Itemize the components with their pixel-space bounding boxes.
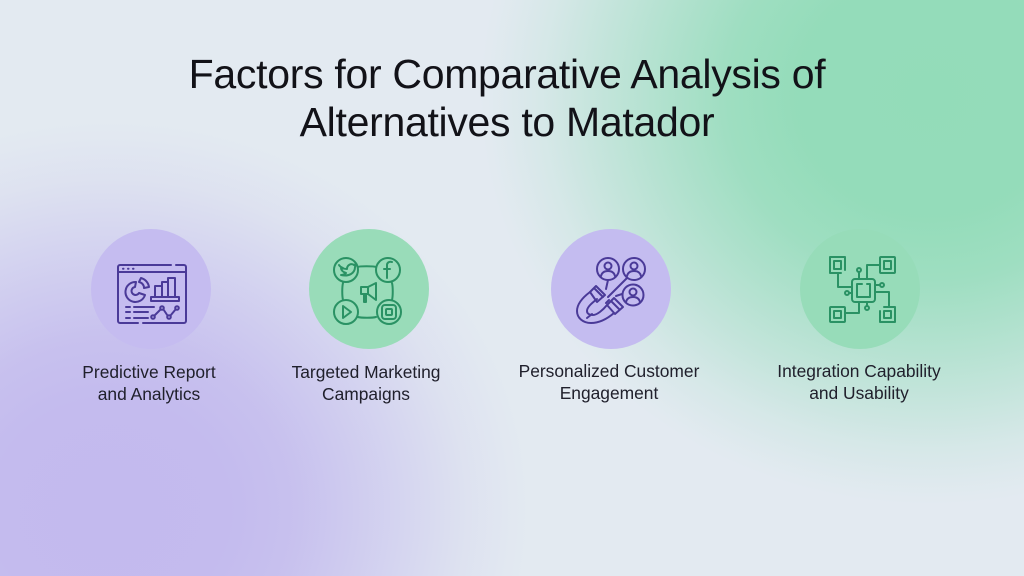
label: integration: and Usability [809,383,909,403]
title [189,51,826,145]
label: predictive report: Predictive Report [82,362,216,382]
label: integration [777,361,941,403]
label: predictive report: and Analytics [98,384,200,404]
label: integration: Integration Capability [777,361,941,381]
icon: social media megaphone [333,257,402,325]
circle: targeted marketing [309,229,429,349]
label: targeted marketing: Campaigns [322,384,410,404]
label: targeted marketing [292,362,440,404]
title: Factors for Comparative Analysis of [189,51,825,97]
label: personalized engagement [519,361,700,403]
label: targeted marketing: Targeted Marketing [292,362,440,382]
title: Alternatives to Matador [300,99,714,145]
label: personalized engagement: Personalized Customer [519,361,699,381]
label: predictive report [82,362,216,404]
icon: analytics dashboard [117,264,187,324]
icon: customer magnet [576,257,646,324]
icon: chip integration [829,256,896,323]
circle: integration [800,229,920,349]
circle: predictive report [91,229,211,349]
label: personalized engagement: Engagement [560,383,658,403]
circle: personalized engagement [551,229,671,349]
